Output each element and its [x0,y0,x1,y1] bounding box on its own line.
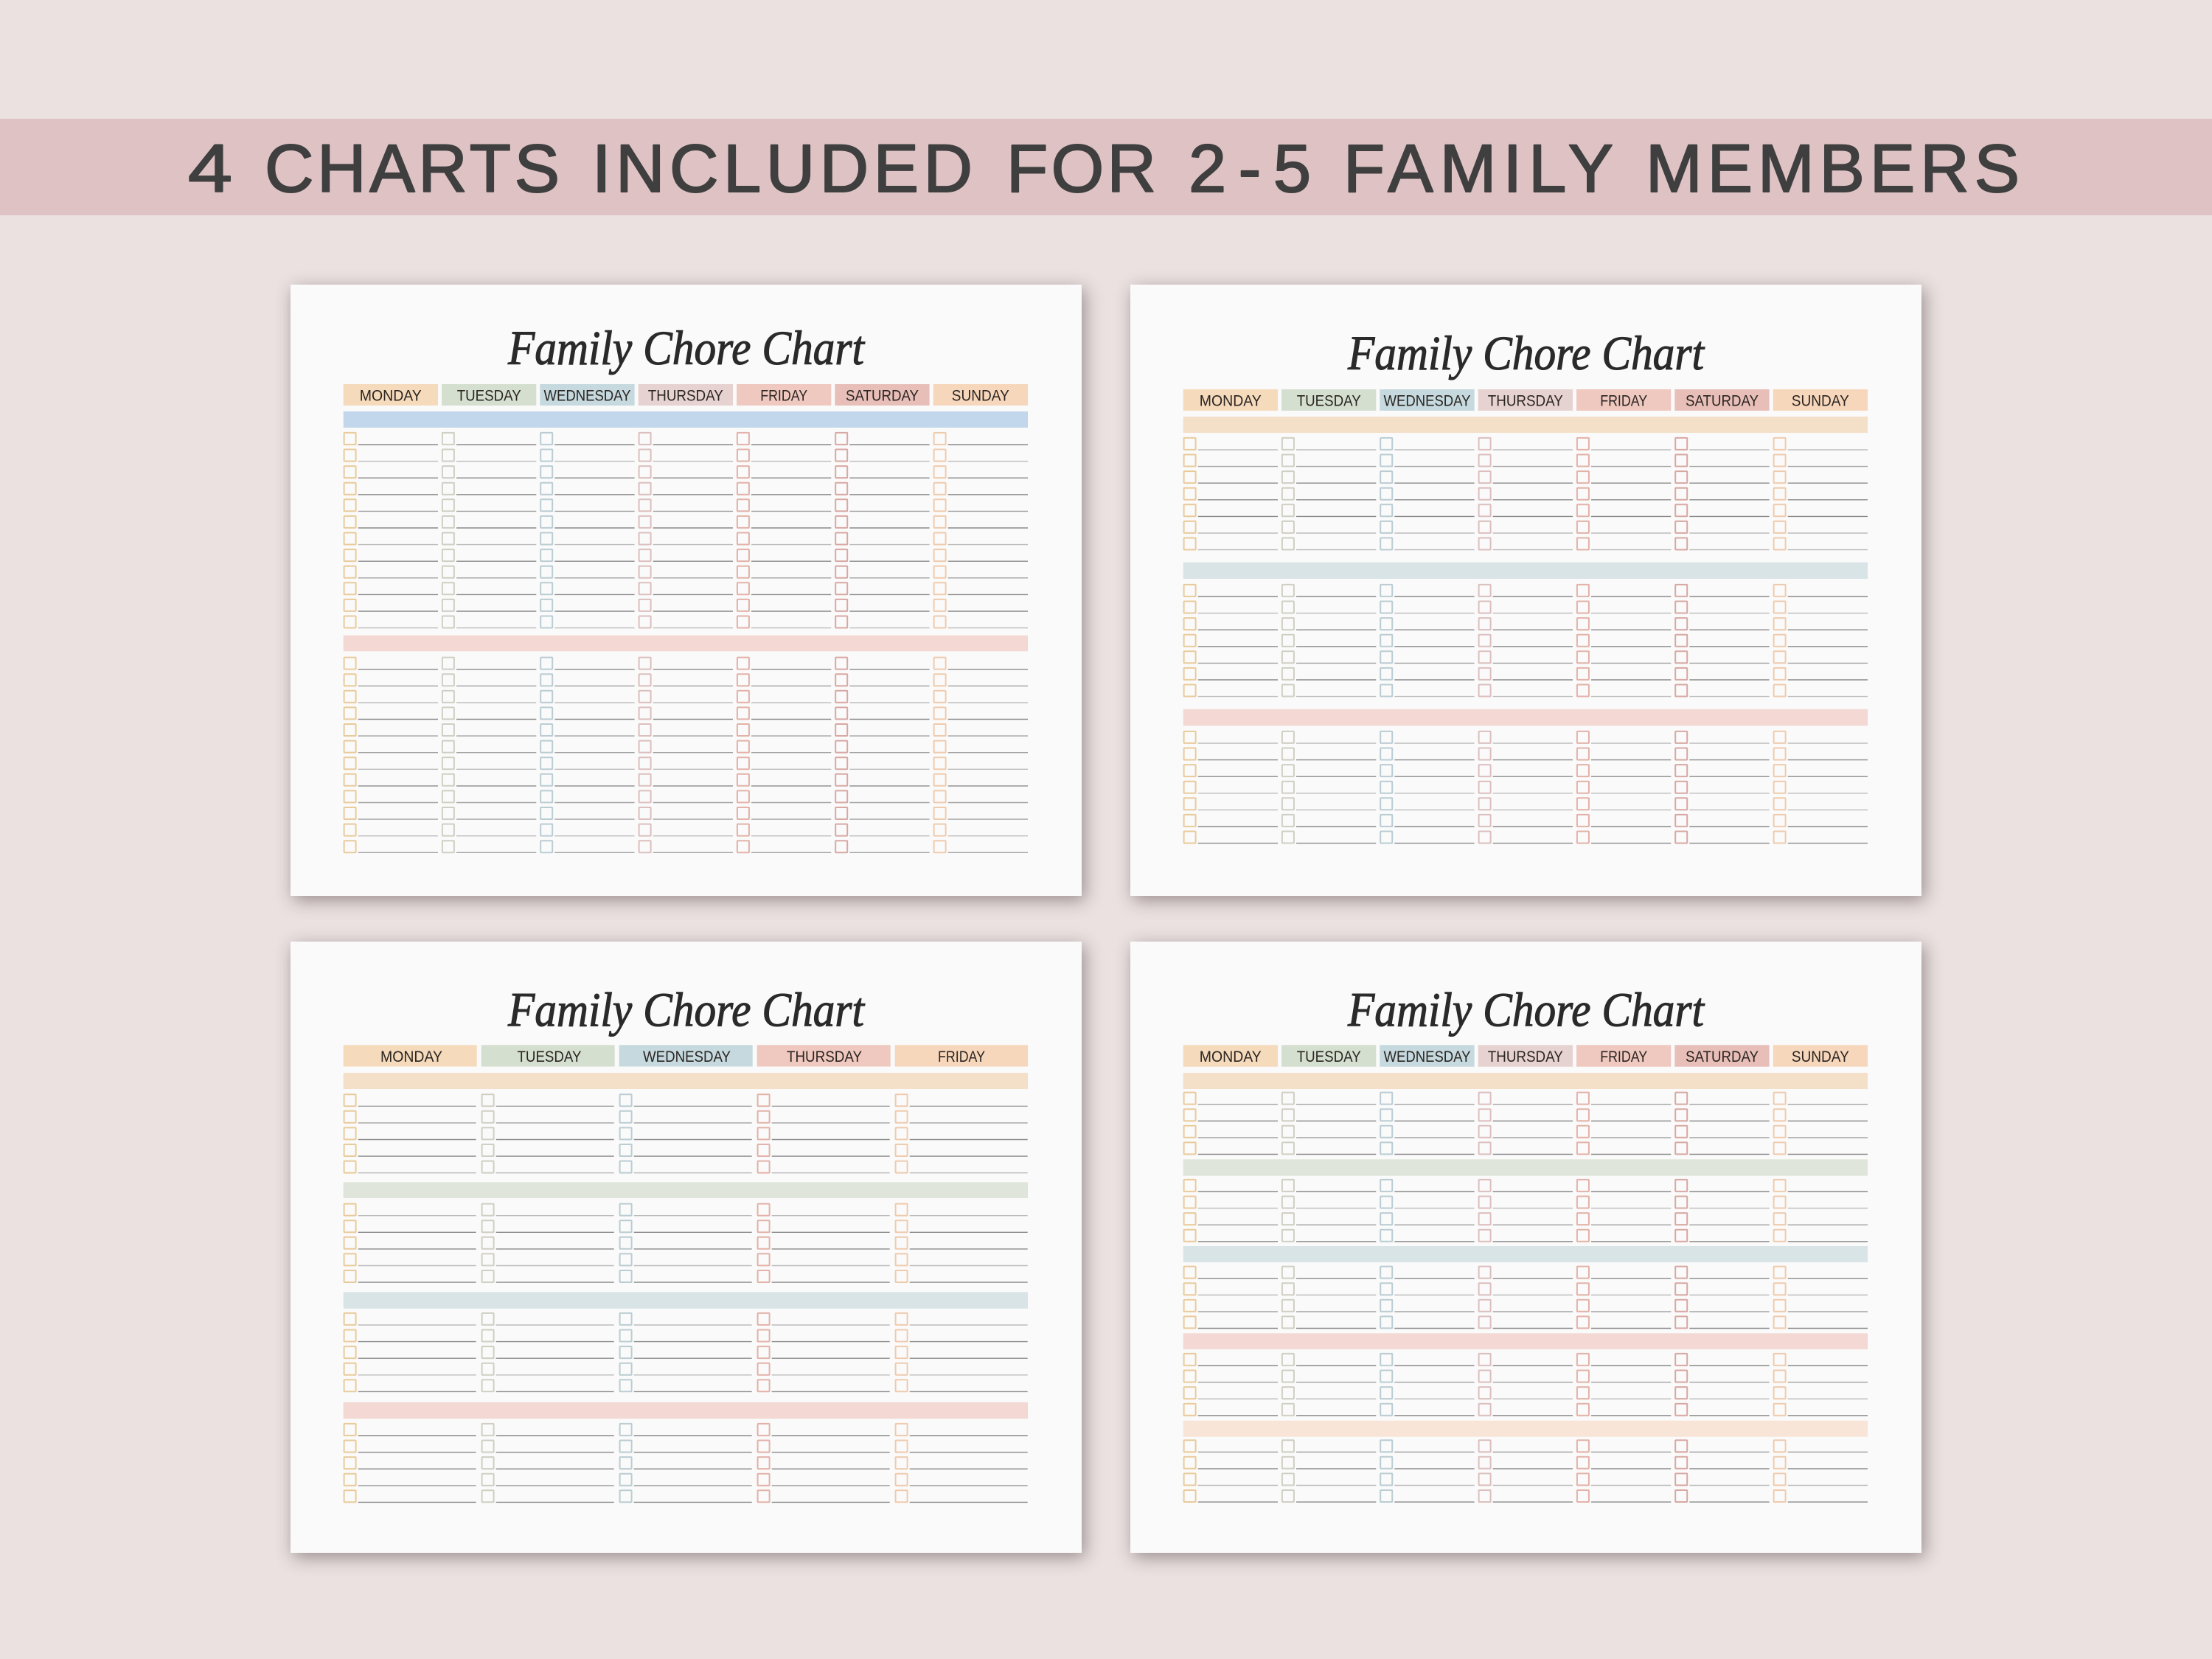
weekday header row: MONDAY [360,386,422,404]
weekday header row: THURSDAY [648,386,723,404]
member bar: pink [1183,709,1868,726]
weekday header row: SATURDAY [1686,392,1759,410]
member bar: light peach [1183,1421,1868,1437]
heading banner: FOR [1006,131,1156,206]
member bar: green [1183,1159,1868,1176]
heading banner: MEMBERS [1646,131,2020,206]
checklist rows: member two [1184,1180,1868,1242]
weekday header row: TUESDAY [1297,1048,1361,1065]
panel: chart for three family members [1130,285,1921,896]
chart title: Family Chore Chart [1347,984,1705,1037]
panel: chart for five family members [1130,942,1921,1553]
weekday header row: MONDAY [380,1048,442,1065]
weekday header row: FRIDAY [938,1048,985,1065]
member bar: blue [344,411,1028,428]
member bar: peach [344,1073,1028,1089]
checklist rows: member one [344,433,1028,628]
checklist rows: member two [344,1204,1028,1282]
weekday header row: WEDNESDAY [1383,1048,1470,1065]
checklist rows: member five [1184,1440,1868,1502]
member bar: peach [1183,417,1868,433]
member bar: green [344,1182,1028,1198]
weekday header row: WEDNESDAY [544,386,631,404]
weekday header row: THURSDAY [787,1048,862,1065]
weekday header row: TUESDAY [1297,392,1361,410]
member bar: pink [1183,1333,1868,1349]
checklist rows: member three [1184,731,1868,844]
checklist rows: member two [1184,585,1868,697]
weekday header row: TUESDAY [457,386,521,404]
weekday header row: SUNDAY [1792,1048,1849,1065]
weekday header row: TUESDAY [518,1048,581,1065]
heading banner: 4 [188,131,232,206]
weekday header row [344,384,1028,406]
chart title: Family Chore Chart [1347,327,1705,380]
checklist rows: member one [1184,1093,1868,1155]
weekday header row: MONDAY [1200,392,1262,410]
weekday header row: SATURDAY [1686,1048,1759,1065]
checklist rows: member three [1184,1267,1868,1329]
weekday header row: FRIDAY [1600,1048,1647,1065]
member bar: peach [1183,1073,1868,1089]
weekday header row: THURSDAY [1488,1048,1563,1065]
member bar: pink [344,1402,1028,1419]
heading banner [0,119,2212,215]
checklist rows: member two [344,658,1028,852]
weekday header row: WEDNESDAY [643,1048,731,1065]
heading banner: 2-5 [1189,131,1311,206]
weekday header row: SUNDAY [1792,392,1849,410]
chart title: Family Chore Chart [507,984,865,1037]
weekday header row: THURSDAY [1488,392,1563,410]
member bar: teal [1183,1246,1868,1262]
checklist rows: member four [1184,1354,1868,1416]
checklist rows: member one [1184,438,1868,550]
panel: five-day chart for four family members [291,942,1082,1553]
weekday header row [1183,1045,1868,1067]
checklist rows: member one [344,1094,1028,1173]
member bar: teal [344,1292,1028,1309]
weekday header row: FRIDAY [1600,392,1647,410]
weekday header row [344,1045,1028,1066]
weekday header row: SUNDAY [952,386,1009,404]
weekday header row: FRIDAY [760,386,807,404]
member bar: teal [1183,563,1868,579]
checklist rows: member four [344,1424,1028,1502]
checklist rows: member three [344,1313,1028,1391]
weekday header row: MONDAY [1200,1048,1262,1065]
heading banner: INCLUDED [592,131,973,206]
panel: chart for two family members [291,285,1082,896]
weekday header row: WEDNESDAY [1383,392,1470,410]
heading banner: FAMILY [1343,131,1613,206]
member bar: pink [344,636,1028,651]
chart title: Family Chore Chart [507,321,865,375]
weekday header row [1183,389,1868,411]
heading banner: CHARTS [265,131,560,206]
weekday header row: SATURDAY [846,386,919,404]
